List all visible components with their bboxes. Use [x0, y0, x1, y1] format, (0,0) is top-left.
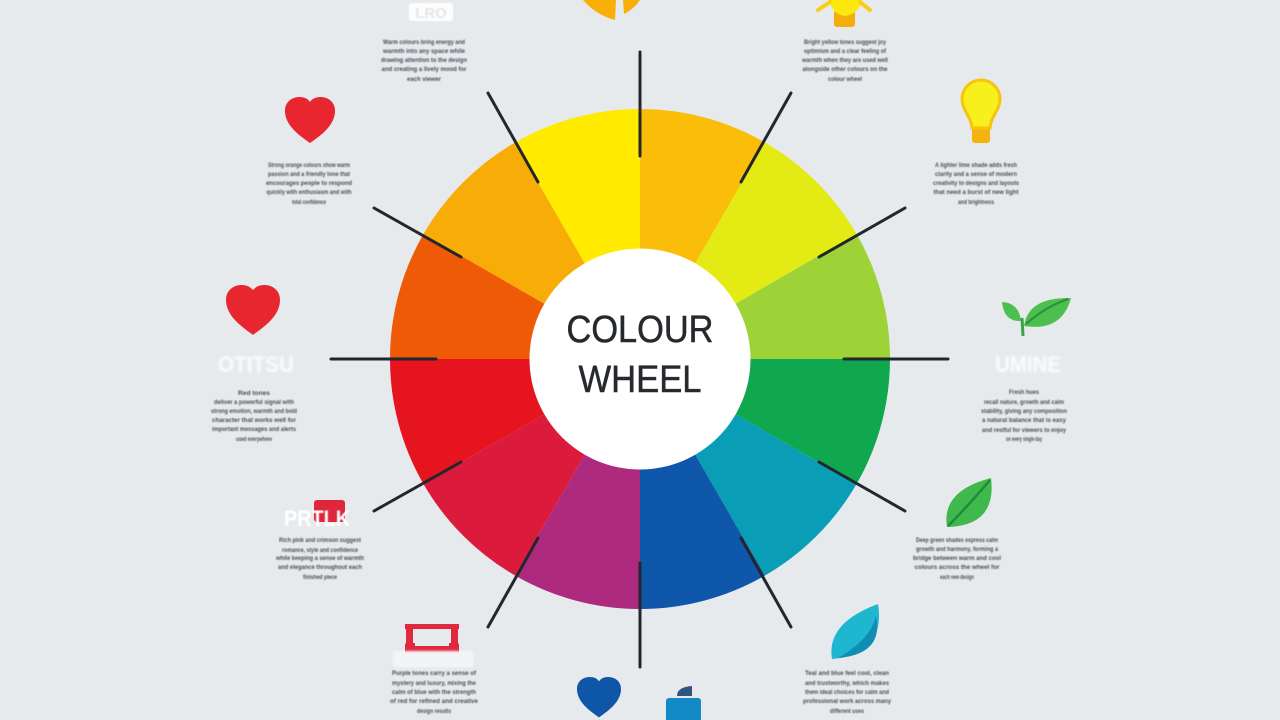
- text block: bottom right: them ideal choices for calm and: [805, 690, 889, 696]
- text block: top left: [381, 40, 467, 83]
- text block: right: and restful for viewers to enjoy: [982, 428, 1067, 434]
- text block: top right: optimism and a clear feeling of: [804, 49, 887, 55]
- icon: blue heart: [577, 677, 621, 717]
- text block: upper right: and brightness: [958, 200, 995, 206]
- text block: top left: Warm colours bring energy and: [383, 40, 465, 46]
- text block: left: Red tones: [238, 391, 271, 397]
- text block: upper right: [933, 163, 1020, 206]
- text block: right: [981, 390, 1067, 443]
- segment: crimson: [424, 359, 640, 576]
- text block: top right: [801, 40, 888, 83]
- segment: yellow: [515, 109, 640, 359]
- segment: blue: [640, 359, 765, 609]
- text block: lower left: while keeping a sense of warmth: [275, 556, 364, 562]
- icon: teal leaf: [831, 604, 879, 659]
- text block: bottom left: design results: [417, 709, 452, 715]
- segment: purple: [515, 359, 640, 609]
- text block: bottom right: professional work across many: [803, 699, 892, 705]
- text block: upper left: [266, 163, 352, 206]
- segment: green: [640, 359, 890, 484]
- text block: top right: alongside other colours on the: [802, 67, 888, 73]
- segment: orange: [390, 234, 640, 359]
- text block: lower right: [913, 538, 1001, 581]
- heading: top left: LRO: [415, 5, 447, 22]
- text block: upper right: A lighter lime shade adds fresh: [935, 163, 1017, 169]
- heading: pink label: PRTLK: [284, 506, 350, 531]
- centre circle with title: [530, 248, 750, 470]
- icon: red label box: [314, 500, 345, 522]
- text block: top left: drawing attention to the design: [381, 58, 467, 64]
- text block: upper left: encourages people to respond: [266, 181, 352, 187]
- text block: right: stability, giving any composition: [981, 409, 1067, 415]
- text block: upper left: total confidence: [292, 200, 326, 206]
- text block: right: a natural balance that is easy: [982, 418, 1067, 424]
- text block: left: strong emotion, warmth and bold: [211, 409, 297, 415]
- text block: top right: colour wheel: [828, 77, 862, 83]
- connector lines: [331, 52, 948, 667]
- text block: bottom left: Purple tones carry a sense of: [392, 671, 477, 677]
- text block: left: important messages and alerts: [212, 427, 297, 433]
- icon: orange top shape: [583, 0, 640, 20]
- text block: upper right: that need a burst of new light: [934, 190, 1018, 196]
- text block: bottom right: and trustworthy, which makes: [805, 681, 890, 687]
- text block: top right: warmth when they are used well: [801, 58, 888, 64]
- colour wheel: [390, 109, 890, 609]
- segment: red: [390, 359, 640, 484]
- text block: top left: warmth into any space while: [382, 49, 466, 55]
- icon: red heart lower: [226, 285, 280, 335]
- icon: blue bottle: [666, 686, 701, 720]
- text block: top left: each viewer: [407, 77, 442, 83]
- text block: upper right: clarity and a sense of modern: [935, 172, 1017, 178]
- text block: bottom right: [803, 671, 892, 715]
- text block: lower left: [275, 538, 364, 581]
- text block: left: character that works well for: [212, 418, 297, 424]
- segment: teal: [640, 359, 856, 576]
- heading: top left: [409, 3, 453, 22]
- text block: right: on every single day: [1006, 437, 1042, 443]
- text block: bottom right: different uses: [830, 709, 865, 715]
- text block: lower left: Rich pink and crimson suggest: [279, 538, 361, 544]
- icon: cropped light bulb: [818, 0, 870, 27]
- text block: lower right: colours across the wheel for: [914, 565, 1000, 571]
- text block: upper left: quickly with enthusiasm and with: [266, 190, 352, 196]
- heading: right: UMINE: [995, 352, 1061, 377]
- icon: sprout: [1002, 298, 1071, 336]
- icon: green leaf: [946, 478, 992, 527]
- segment: amber: [640, 109, 765, 359]
- text block: lower right: each new design: [940, 575, 974, 581]
- text block: top right: Bright yellow tones suggest joy: [804, 40, 887, 46]
- text block: left: used everywhere: [236, 437, 272, 443]
- text block: left: deliver a powerful signal with: [214, 400, 294, 406]
- text block: bottom left: [390, 671, 479, 715]
- text block: bottom left: calm of blue with the strength: [392, 690, 476, 696]
- segment: yellow green: [640, 234, 890, 359]
- text block: lower left: and elegance throughout each: [278, 565, 362, 571]
- heading: lower left band: [393, 651, 473, 667]
- icon: red heart upper: [285, 97, 335, 143]
- segment: lime yellow: [640, 142, 856, 359]
- text block: left: [211, 391, 297, 443]
- text block: upper left: passion and a friendly tone that: [268, 172, 350, 178]
- segment: golden orange: [424, 142, 640, 359]
- text block: right: recall nature, growth and calm: [984, 400, 1064, 406]
- text block: bottom left: of red for refined and creative: [390, 699, 479, 705]
- heading: left: OTITSU: [218, 352, 294, 377]
- icon: light bulb: [962, 80, 1000, 143]
- text block: bottom right: Teal and blue feel cool, clean: [805, 671, 889, 677]
- text block: bottom left: mystery and luxury, mixing the: [392, 681, 477, 687]
- text block: upper right: creativity to designs and layouts: [933, 181, 1020, 187]
- icon: red monitor: [405, 624, 459, 656]
- text block: lower right: growth and harmony, forming a: [916, 547, 999, 553]
- text block: lower left: finished piece: [303, 575, 338, 581]
- text block: right: Fresh hues: [1009, 390, 1040, 396]
- text block: lower right: bridge between warm and cool: [913, 556, 1001, 562]
- title: COLOUR: [566, 309, 714, 351]
- text block: lower right: Deep green shades express calm: [916, 538, 998, 544]
- title line two: WHEEL: [578, 359, 702, 401]
- text block: upper left: Strong orange colours show warm: [268, 163, 350, 169]
- text block: top left: and creating a lively mood for: [382, 67, 467, 73]
- text block: lower left: romance, style and confidence: [282, 548, 359, 554]
